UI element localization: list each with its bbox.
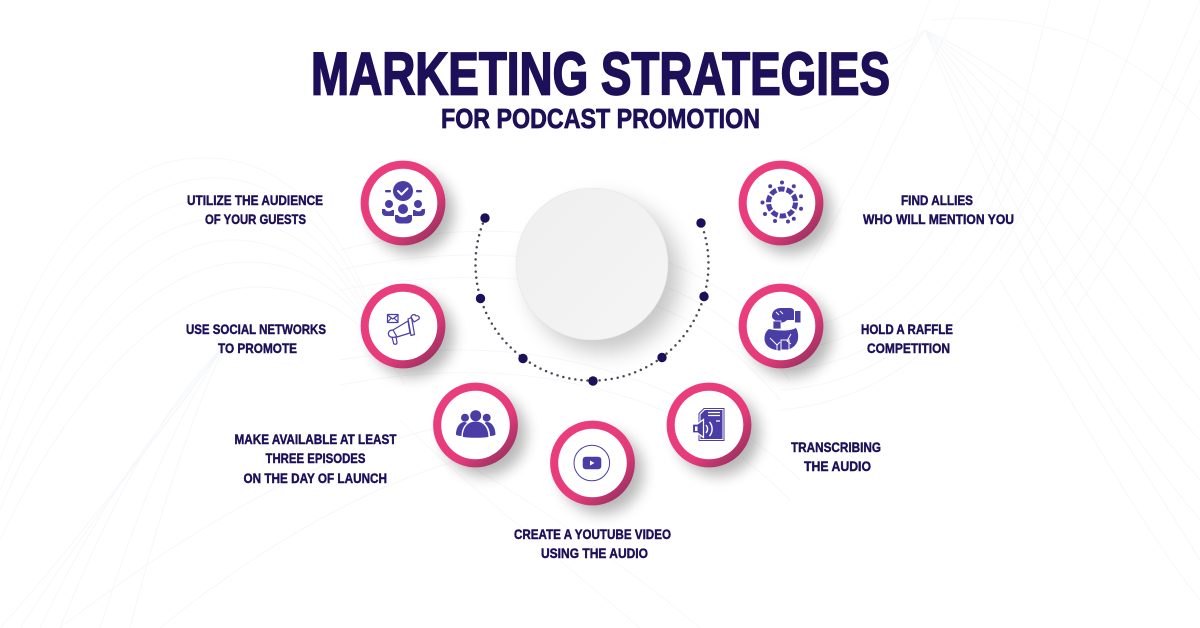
label: three episodes: [234, 431, 397, 486]
badge: audience of guests: [361, 161, 454, 254]
label: utilize the audience: OF YOUR GUESTS: [205, 211, 306, 227]
label: use social networks: TO PROMOTE: [218, 340, 297, 356]
label: allies: WHO WILL MENTION YOU: [863, 211, 1014, 227]
label: allies: [863, 192, 1014, 227]
label: youtube video: CREATE A YOUTUBE VIDEO: [514, 526, 671, 542]
label: youtube video: [514, 526, 671, 561]
label: utilize the audience: UTILIZE THE AUDIENCE: [187, 192, 323, 208]
label: transcribing: [791, 439, 881, 474]
label: transcribing: THE AUDIO: [804, 458, 871, 474]
label: three episodes: ON THE DAY OF LAUNCH: [244, 470, 387, 486]
label: allies: FIND ALLIES: [901, 192, 973, 208]
icon: circle of people: [760, 180, 803, 224]
label: three episodes: THREE EPISODES: [266, 450, 366, 466]
icon: guests with check: [382, 181, 425, 224]
label: transcribing: TRANSCRIBING: [791, 439, 881, 455]
label: raffle: HOLD A RAFFLE: [861, 321, 953, 337]
label: raffle: [861, 321, 953, 356]
dotted arc with node dots: [475, 213, 709, 386]
subtitle: FOR PODCAST PROMOTION: [441, 103, 760, 134]
badge: youtube video: [550, 421, 644, 514]
title: MARKETING STRATEGIES: [311, 40, 890, 108]
icon: audio document: [692, 408, 724, 440]
icon: video play button: [574, 445, 610, 481]
label: raffle: COMPETITION: [867, 340, 950, 356]
label: youtube video: USING THE AUDIO: [541, 545, 648, 561]
label: three episodes: MAKE AVAILABLE AT LEAST: [234, 431, 397, 447]
badge: find allies: [739, 161, 832, 254]
label: utilize the audience: [187, 192, 323, 227]
icon: megaphone with envelope and heart: [388, 314, 419, 344]
label: use social networks: USE SOCIAL NETWORKS: [186, 321, 326, 337]
badge: transcribing: [667, 383, 760, 476]
badge: raffle competition: [739, 284, 832, 377]
badge: three episodes: [433, 383, 526, 476]
icon: group of people: [456, 410, 496, 438]
badge: social networks: [361, 284, 454, 377]
center disc: [516, 188, 680, 352]
label: use social networks: [186, 321, 326, 356]
icon: hand dropping ticket into bag: [764, 308, 800, 350]
